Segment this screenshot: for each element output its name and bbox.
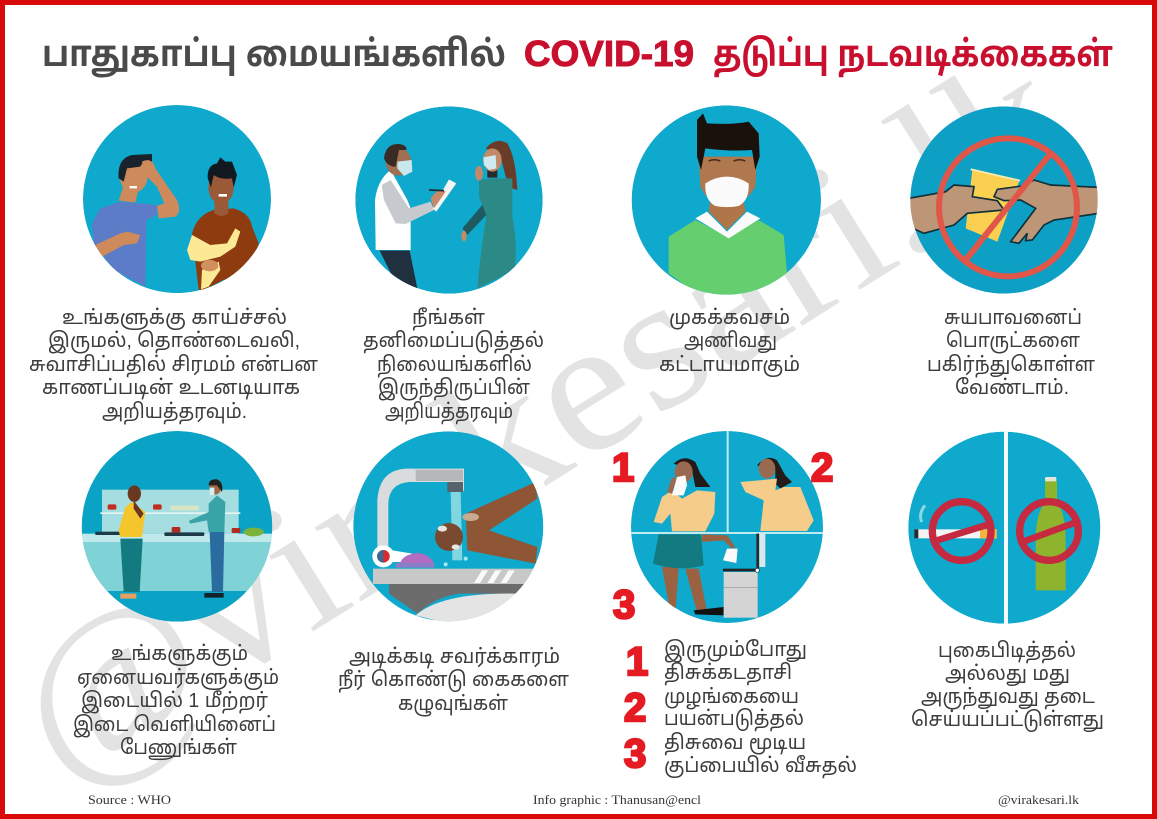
text: numbered cough steps: [624, 638, 857, 778]
icon: physical distancing: [80, 431, 274, 622]
text: personal items: பகிர்ந்துகொள்ள: [927, 354, 1096, 378]
text: masks: முகக்கவசம்: [669, 307, 790, 330]
title: [42, 33, 1113, 78]
icon: no smoking or alcohol: [908, 430, 1100, 627]
icon: do not share items: [909, 106, 1099, 294]
text: personal items: வேண்டாம்.: [955, 376, 1069, 399]
icon: hand washing: [353, 431, 543, 624]
text: numbered cough steps: 3: [624, 732, 646, 776]
text: symptoms: அறியத்தரவும்.: [102, 401, 247, 425]
text: numbered cough steps: குப்பையில் வீசுதல்: [664, 754, 857, 778]
text: symptoms: உங்களுக்கு காய்ச்சல்: [62, 307, 287, 330]
title: பாதுகாப்பு மையங்களில்: [42, 33, 506, 77]
text: hand washing: கழுவுங்கள்: [398, 693, 509, 717]
text: hand washing: அடிக்கடி சவர்க்காரம்: [349, 646, 560, 669]
text: symptoms: காணப்படின் உடனடியாக: [42, 377, 300, 400]
text: numbered cough steps: திசுக்கடதாசி: [664, 662, 792, 685]
text: personal items: [927, 307, 1096, 399]
text: isolation: [363, 306, 544, 425]
text: numbered cough steps: பயன்படுத்தல்: [664, 708, 804, 731]
text: hand washing: நீர் கொண்டு கைகளை: [338, 668, 570, 693]
text: masks: [659, 307, 800, 377]
text: personal items: பொருட்களை: [946, 330, 1081, 354]
red step numbers on illustration: 1: [612, 446, 634, 490]
text: distancing: ஏனையவர்களுக்கும்: [77, 667, 279, 690]
text: smoking and alcohol: அருந்துவது தடை: [921, 686, 1095, 710]
icon: doctor and patient: [355, 106, 543, 294]
text: isolation: இருந்திருப்பின்: [378, 377, 530, 401]
footer credits: [88, 792, 1080, 807]
footer credits: @virakesari.lk: [998, 792, 1080, 807]
text: smoking and alcohol: செய்யப்பட்டுள்ளது: [911, 709, 1104, 733]
text: numbered cough steps: திசுவை மூடிய: [664, 732, 806, 755]
text: isolation: நிலையங்களில்: [377, 354, 532, 378]
text: numbered cough steps: 2: [624, 686, 646, 730]
red step numbers on illustration: 3: [613, 583, 635, 627]
text: symptoms: சுவாசிப்பதில் சிரமம் என்பன: [29, 354, 318, 377]
text: masks: அணிவது: [684, 330, 777, 354]
text: numbered cough steps: 1: [626, 640, 648, 684]
text: distancing: இடை வெளியினைப்: [73, 714, 276, 738]
red step numbers on illustration: 2: [811, 446, 833, 490]
icon: face mask: [632, 105, 821, 297]
text: distancing: உங்களுக்கும்: [111, 643, 248, 666]
text: isolation: நீங்கள்: [412, 306, 486, 331]
text: distancing: பேணுங்கள்: [120, 736, 238, 760]
text: distancing: இடையில் 1 மீற்றர்: [81, 689, 268, 714]
text: smoking and alcohol: [911, 640, 1104, 733]
text: smoking and alcohol: அல்லது மது: [945, 663, 1070, 687]
footer credits: Info graphic : Thanusan@encl: [533, 792, 701, 807]
text: symptoms: இருமல், தொண்டைவலி,: [48, 330, 300, 354]
text: smoking and alcohol: புகைபிடித்தல்: [938, 640, 1076, 663]
text: numbered cough steps: இருமும்போது: [664, 638, 807, 663]
title: COVID-19: [524, 33, 694, 74]
footer credits: Source : WHO: [88, 792, 171, 807]
text: masks: கட்டாயமாகும்: [659, 354, 800, 377]
red step numbers on illustration: [612, 446, 833, 627]
text: distancing: [73, 643, 279, 760]
icon: fever and cough: [83, 105, 271, 293]
text: isolation: அறியத்தரவும்: [385, 401, 513, 425]
text: symptoms: [29, 307, 318, 425]
text: numbered cough steps: முழங்கையை: [664, 686, 799, 710]
text: personal items: சுயபாவனைப்: [944, 307, 1082, 329]
text: hand washing: [338, 646, 570, 717]
watermark: @virakesari.lk: [0, 9, 1104, 819]
icon: cough etiquette: [630, 430, 824, 623]
text: isolation: தனிமைப்படுத்தல்: [363, 330, 544, 353]
